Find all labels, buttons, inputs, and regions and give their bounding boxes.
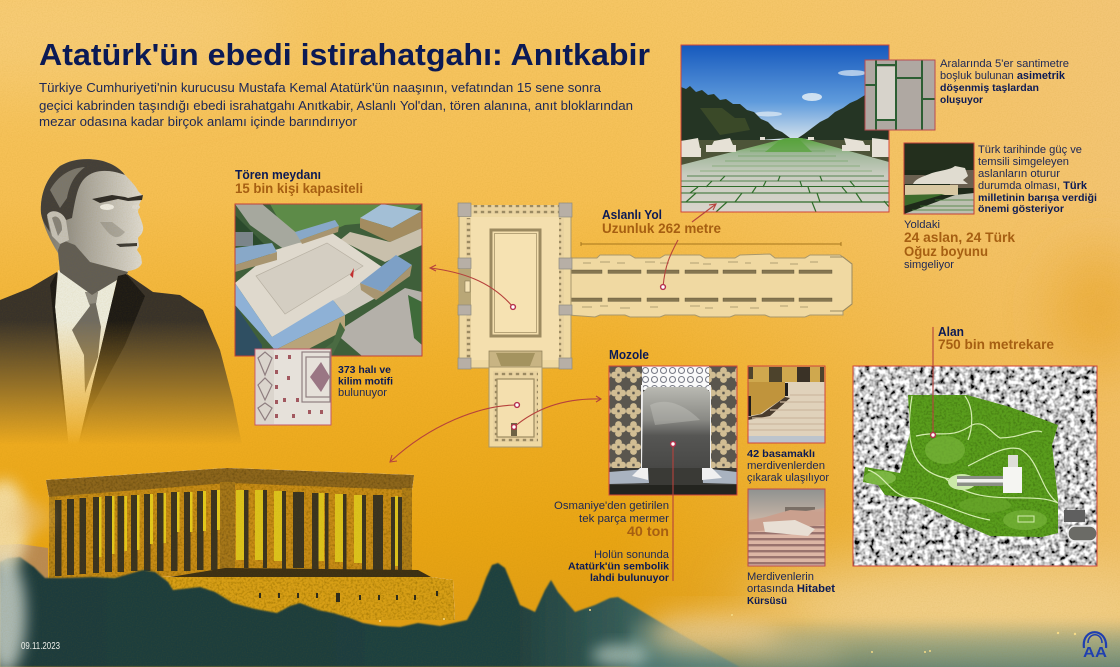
text: lion symbolism: milletinin barışa verdiği <box>978 192 1097 204</box>
text: lion symbolism: temsili simgeleyen <box>978 156 1069 168</box>
tomb caption: Atatürk'ün sembolik <box>568 560 669 572</box>
intro paragraph <box>39 80 633 129</box>
intro paragraph: geçici kabrinden taşındığı ebedi israhatgahı Anıtkabir, Aslanlı Yol'dan, tören alanına, anıt bloklarından <box>39 98 633 113</box>
photo: 42 steps <box>748 366 825 443</box>
arrow: to mausoleum photo <box>514 396 601 427</box>
neck and head <box>41 159 143 295</box>
mausoleum <box>360 204 422 228</box>
carpet motif inset <box>255 349 331 425</box>
intro paragraph: mezar odasına kadar birçok anlamı içinde barındırıyor <box>39 114 358 129</box>
Anıtkabir complex on the map <box>948 474 976 490</box>
plan: Aslanlı Yol road <box>568 254 852 317</box>
panel: Alan <box>853 325 1097 566</box>
podium windows <box>259 591 438 602</box>
text: lion symbolism <box>978 144 1097 215</box>
distant hill <box>0 544 48 580</box>
marble caption <box>554 500 669 539</box>
arrow: to building <box>390 405 517 462</box>
date: 09.11.2023 <box>21 641 60 652</box>
stadium <box>1064 510 1085 522</box>
map frame <box>853 366 1097 566</box>
tomb caption: lahdi bulunuyor <box>590 572 669 584</box>
text: lion symbolism: Türk tarihinde güç ve <box>978 144 1082 156</box>
portrait of Atatürk <box>0 159 245 460</box>
arrow: to ceremonial square photo <box>430 265 513 307</box>
heading: area <box>938 325 1054 352</box>
steps caption: merdivenlerden <box>747 460 825 472</box>
smoke left <box>0 480 28 570</box>
text: lion symbolism: aslanların oturur <box>978 168 1060 180</box>
ear <box>47 211 69 244</box>
tie <box>72 292 101 393</box>
plan: towers <box>458 203 572 369</box>
photo: ceremonial square <box>235 204 422 356</box>
floor plan of Anıtkabir <box>390 203 852 462</box>
label: Aslanlı Yol: Uzunluk 262 metre <box>602 220 721 236</box>
text: 24 lions: Yoldaki <box>904 219 940 231</box>
plan: ceremonial square <box>459 208 571 368</box>
main photo frame <box>681 45 889 212</box>
aerial map <box>853 366 1097 566</box>
brow, eyes, mouth <box>92 195 143 203</box>
marble caption: Osmaniye'den getirilen <box>554 500 669 512</box>
text: lion symbolism: önemi gösteriyor <box>978 203 1064 215</box>
photo: symbolic tomb <box>609 366 737 495</box>
inset: paving stones <box>865 60 935 130</box>
plan: lion beds <box>567 270 832 301</box>
text: lion symbolism: durumda olması, Türk <box>978 180 1088 192</box>
facade <box>46 468 414 579</box>
podium caption <box>747 571 835 607</box>
plaza <box>235 233 382 337</box>
steps caption: çıkarak ulaşılıyor <box>747 472 829 484</box>
Anıtkabir building <box>0 468 455 620</box>
trees left <box>681 86 790 145</box>
text: asymmetric paving: döşenmiş taşlardan <box>940 82 1039 94</box>
column shadows: left wing <box>55 490 218 576</box>
plan: road end <box>830 257 852 311</box>
text: asymmetric paving: boşluk bulunan asimetrik <box>940 70 1066 82</box>
text: 24 lions: 24 aslan, 24 Türk <box>904 229 1015 245</box>
logo: AA <box>1083 632 1107 661</box>
title: Atatürk'ün ebedi istirahatgahı: Anıtkabir <box>39 37 650 72</box>
tree line and mist <box>0 480 1120 667</box>
jacket <box>0 272 240 440</box>
tomb caption <box>568 549 670 584</box>
text: 24 lions <box>904 219 1015 271</box>
heading: Tören meydanı: Tören meydanı <box>235 168 321 182</box>
carpet caption: 373 halı ve <box>338 364 391 376</box>
podium caption: Kürsüsü <box>747 595 787 607</box>
text: asymmetric paving: oluşuyor <box>940 94 983 106</box>
shirt <box>55 270 118 450</box>
text: asymmetric paving: Aralarında 5'er santimetre <box>940 58 1069 70</box>
text: asymmetric paving <box>940 58 1069 106</box>
lapels <box>50 272 67 428</box>
steps caption <box>747 448 829 484</box>
city lights <box>379 609 1076 653</box>
panel: Tören meydanı <box>235 168 422 425</box>
map marker and leader <box>931 327 935 437</box>
podium <box>100 577 455 620</box>
plan: square inner court <box>491 230 540 336</box>
photo: Aslanlı Yol road <box>681 45 890 212</box>
panel: Mozole <box>554 348 835 607</box>
heading: area: 750 bin metrekare <box>938 336 1054 352</box>
plan: paving marks <box>582 262 818 308</box>
hair <box>41 159 125 232</box>
park paths <box>868 396 1058 520</box>
podium caption: Merdivenlerin <box>747 571 814 583</box>
arrow: road marker leader <box>663 240 678 287</box>
photo: lion statue <box>904 143 974 214</box>
plinth steps <box>170 568 431 577</box>
intro paragraph: Türkiye Cumhuriyeti'nin kurucusu Mustafa Kemal Atatürk'ün naaşının, vefatından 15 sene sonra <box>39 80 602 95</box>
trees right <box>798 95 888 140</box>
paving joints near <box>681 176 890 212</box>
lit windows: right wing <box>236 490 398 566</box>
column shadows: right wing <box>244 490 402 570</box>
plan: colonnades <box>471 205 559 214</box>
lit slivers: left wing <box>99 490 220 557</box>
podium caption: ortasında Hitabet <box>747 583 835 595</box>
carpet caption: kilim motifi <box>338 376 393 388</box>
carpet caption <box>338 364 393 399</box>
ground <box>682 140 888 165</box>
label: Aslanlı Yol: Aslanlı Yol <box>602 208 662 222</box>
right bottom haze <box>630 618 1120 667</box>
logo: AA: AA <box>1083 644 1107 661</box>
mist centre <box>645 614 785 650</box>
colonnade roofs <box>235 243 277 265</box>
lion statues <box>681 137 889 157</box>
leader line <box>671 442 675 581</box>
arrow: to Aslanlı Yol photo <box>692 204 716 222</box>
parking area <box>335 288 422 356</box>
text: 24 lions: Oğuz boyunu <box>904 243 988 259</box>
dimension line <box>581 242 841 246</box>
park area <box>860 390 1060 540</box>
plan: mausoleum steps <box>489 351 542 367</box>
markers <box>511 285 665 429</box>
heading: Mozole: Mozole <box>609 348 649 362</box>
steps caption: 42 basamaklı <box>747 448 815 460</box>
carpet caption: bulunuyor <box>338 387 387 399</box>
heading: area: Alan <box>938 325 964 339</box>
plan: mausoleum <box>489 367 542 447</box>
marble caption: tek parça mermer <box>579 513 669 525</box>
photo frame <box>235 204 422 356</box>
marble caption: 40 ton <box>627 523 669 539</box>
tomb caption: Holün sonunda <box>594 549 670 561</box>
neck shadow <box>58 240 128 295</box>
paving joints far <box>700 151 872 171</box>
label: Aslanlı Yol <box>602 208 721 236</box>
photo: Hitabet Kürsüsü <box>748 489 825 566</box>
photo frame <box>609 366 737 495</box>
capacity figure: 15 bin kişi kapasiteli <box>235 180 363 196</box>
text: 24 lions: simgeliyor <box>904 259 954 271</box>
